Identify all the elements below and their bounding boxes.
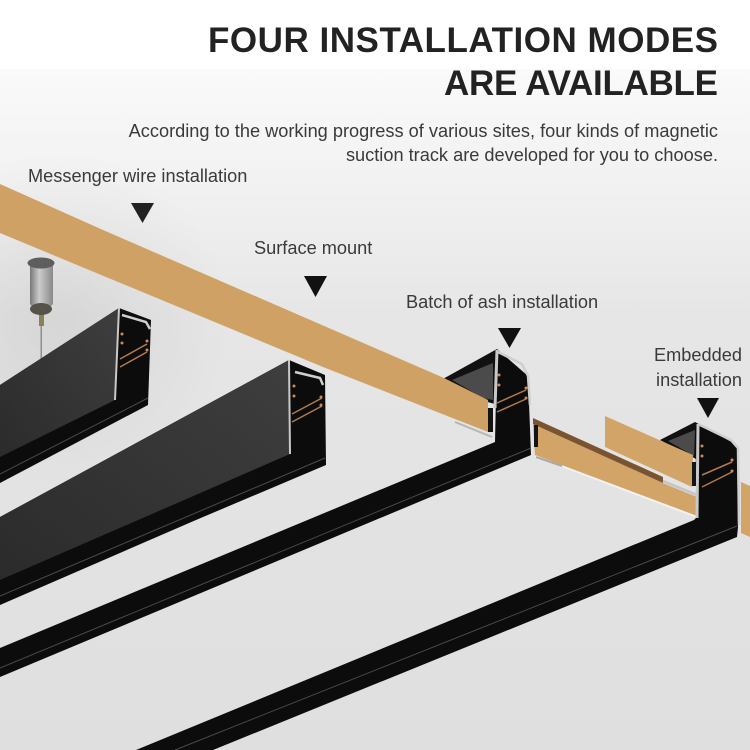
label: embedded installation: [654, 345, 742, 418]
title: ARE AVAILABLE: [444, 64, 718, 103]
icon: hanging wire fixture: [28, 258, 54, 362]
description text: [129, 121, 718, 165]
label: messenger wire installation: [28, 166, 247, 223]
track: surface mount: [0, 360, 326, 605]
wood panel: middle section: [533, 418, 697, 517]
track: messenger wire: [0, 308, 151, 483]
wood panel: upper section: [605, 416, 693, 487]
description text: According to the working progress of various sites, four kinds of magnetic: [129, 121, 718, 141]
wood ceiling band: [0, 184, 488, 432]
recess behind wood: batch of ash track: [441, 349, 497, 404]
label: messenger wire installation: Messenger wire installation: [28, 166, 247, 186]
track: embedded installation: [136, 422, 739, 750]
wood panel: right edge: [741, 482, 750, 537]
label: embedded installation: Embedded: [654, 345, 742, 365]
label: surface mount: [254, 238, 372, 297]
title: FOUR INSTALLATION MODES: [208, 21, 718, 60]
label: surface mount: Surface mount: [254, 238, 372, 258]
label: embedded installation: installation: [656, 370, 742, 390]
title: [208, 21, 718, 103]
label: batch of ash installation: [406, 292, 598, 348]
track: batch of ash installation: [0, 349, 531, 677]
recess behind wood: embedded track: [660, 422, 698, 460]
label: batch of ash installation: Batch of ash installation: [406, 292, 598, 312]
description text: suction track are developed for you to choose.: [346, 145, 718, 165]
